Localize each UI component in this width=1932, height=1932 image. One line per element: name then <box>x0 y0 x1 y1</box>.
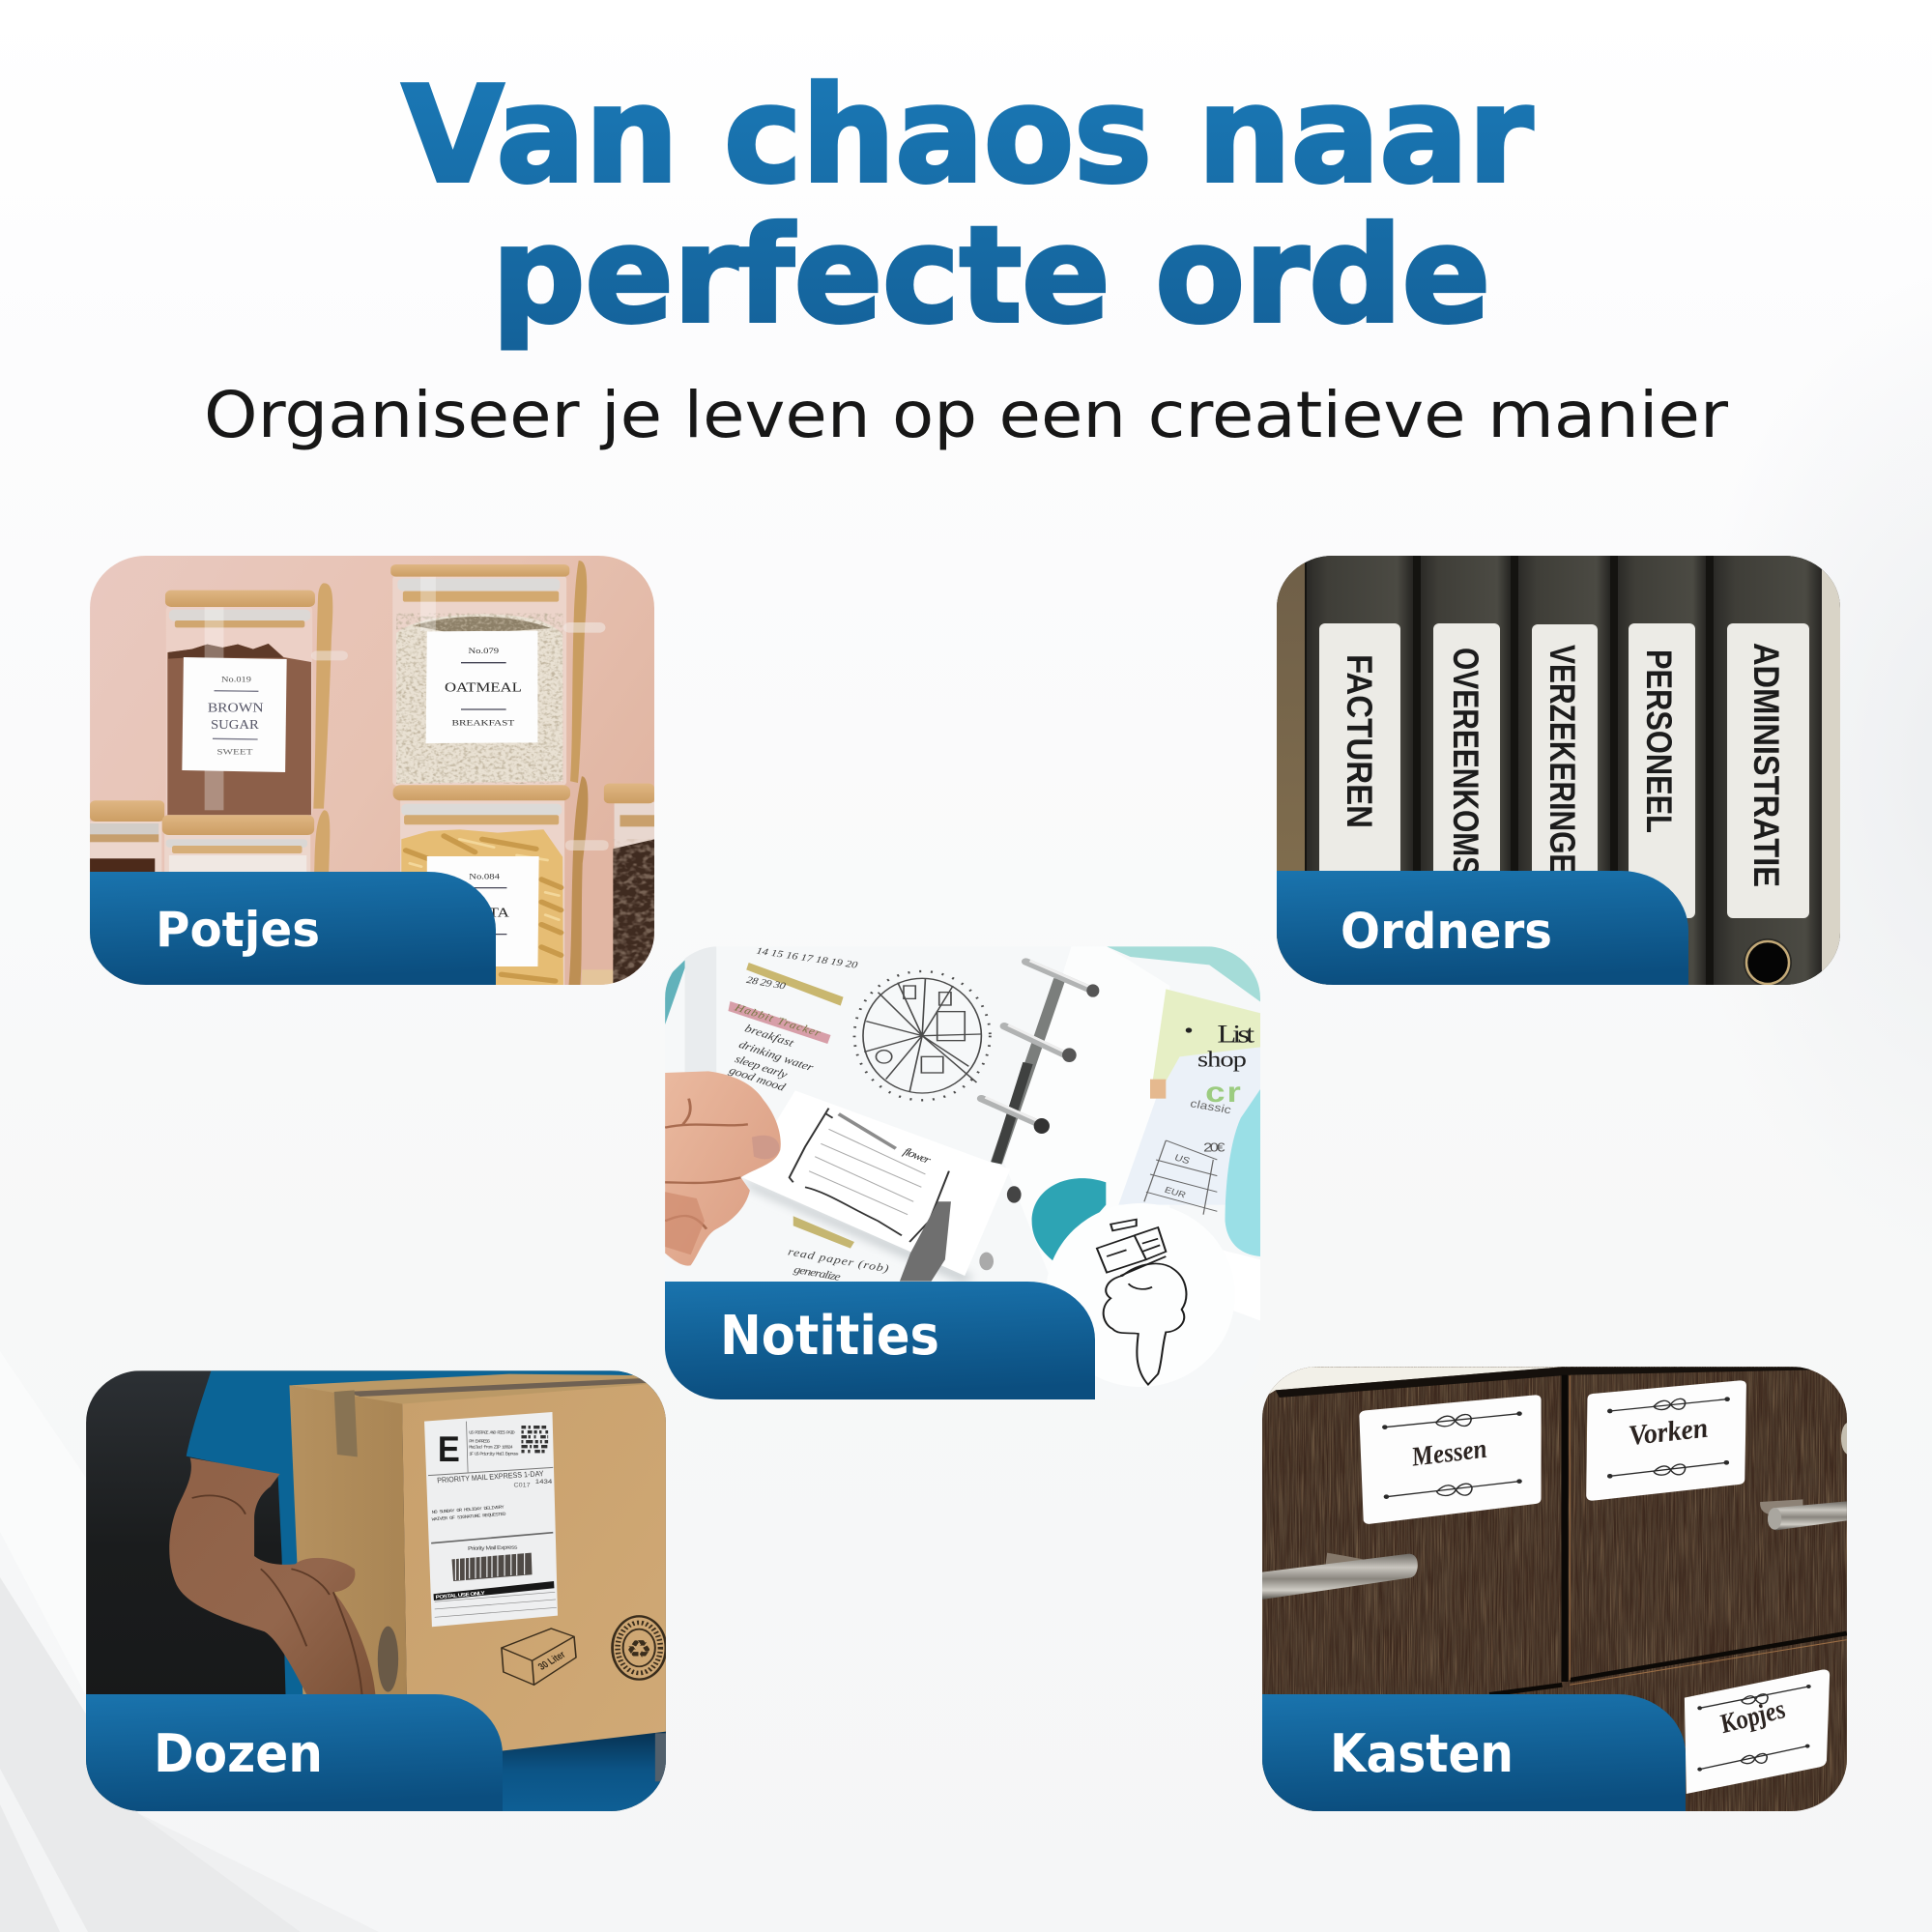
label: Vorken: Vorken <box>1627 1411 1710 1451</box>
label: pasta: PASTA <box>460 905 509 920</box>
price tag and stripes: EUR <box>1163 1186 1187 1200</box>
calendar and tracker notes <box>727 946 859 1093</box>
price tag and stripes: 20€ <box>1203 1141 1226 1155</box>
shipping label: PRIORITY MAIL EXPRESS 1-DAY <box>437 1469 544 1485</box>
label band: Ordners <box>1277 871 1688 985</box>
box pictogram: 30 Liter <box>536 1649 568 1673</box>
label: brown sugar: SUGAR <box>211 717 260 733</box>
shipping label <box>424 1412 558 1627</box>
label band: Ordners: Ordners <box>1341 904 1552 961</box>
photo: binders <box>1277 556 1840 987</box>
shipping label: WAIVER OF SIGNATURE REQUESTED <box>432 1512 506 1522</box>
label: ADMINISTRATIE <box>1727 623 1809 918</box>
teal shape <box>1032 1178 1106 1263</box>
handle: right <box>1760 1499 1847 1530</box>
jar: pasta <box>393 776 609 985</box>
label: OVEREENKOMSTEN <box>1433 623 1500 871</box>
label: PERSONEEL <box>1629 623 1695 918</box>
jar: lower middle <box>162 810 330 872</box>
calendar and tracker notes: 14 15 16 17 18 19 20 <box>755 946 859 970</box>
label band: Potjes: Potjes <box>156 902 320 958</box>
shipping label: PM EXPRESS <box>469 1439 490 1444</box>
recycling stamp: ♻ <box>626 1634 652 1663</box>
lower handwriting <box>787 1216 890 1283</box>
label band: Dozen <box>86 1694 503 1811</box>
teal device <box>1226 1089 1260 1256</box>
sticker circle with cat doodle <box>1053 1203 1187 1386</box>
calendar and tracker notes: breakfast <box>743 1023 796 1050</box>
door knob edge <box>1841 1423 1857 1455</box>
label: FACTUREN <box>1319 623 1400 985</box>
hand <box>665 1071 781 1266</box>
label: FACTUREN: FACTUREN <box>1340 654 1379 828</box>
jar: brown sugar <box>165 583 348 817</box>
label band: Dozen: Dozen <box>154 1723 323 1784</box>
label: Kopjes <box>1685 1670 1830 1794</box>
shipping label: Mailed from ZIP 10024 <box>469 1445 513 1450</box>
label: brown sugar: No.019 <box>221 675 252 683</box>
label: Vorken <box>1586 1380 1746 1501</box>
shipping label: NO SUNDAY OR HOLIDAY DELIVERY <box>432 1505 505 1515</box>
panel: potjes <box>90 556 654 985</box>
label band: Notities: Notities <box>720 1305 939 1368</box>
label: Messen: Messen <box>1408 1433 1489 1472</box>
label: oatmeal <box>426 631 537 743</box>
panel: dozen <box>86 1370 666 1811</box>
label: brown sugar <box>182 657 287 772</box>
label: oatmeal: OATMEAL <box>445 679 522 695</box>
panel: ordners <box>1277 556 1840 987</box>
title <box>402 59 1533 353</box>
jar: oatmeal <box>390 561 605 786</box>
jar: left small <box>90 800 164 872</box>
label: VERZEKERINGEN <box>1532 624 1598 871</box>
calendar and tracker notes: good mood <box>727 1064 788 1093</box>
time wheel drawing <box>854 971 990 1100</box>
binder ring <box>1744 938 1792 987</box>
shipping label: E <box>438 1429 460 1469</box>
label: brown sugar: BROWN <box>208 701 264 715</box>
binder rings <box>979 961 1099 1270</box>
binder clip <box>900 1201 951 1282</box>
label: pasta: No.084 <box>469 872 501 880</box>
subtitle: Organiseer je leven op een creatieve manier <box>204 378 1729 452</box>
label: Kopjes: Kopjes <box>1715 1694 1790 1740</box>
jar: coffee <box>604 784 654 985</box>
label band: Potjes <box>90 872 496 985</box>
shipping label: POSTAL USE ONLY <box>435 1591 485 1600</box>
calendar and tracker notes: sleep early <box>733 1053 790 1081</box>
lower handwriting: generalize <box>793 1263 843 1283</box>
calendar and tracker notes: 28 29 30 <box>745 975 787 992</box>
price tag and stripes: shop <box>1197 1047 1247 1072</box>
recycling stamp <box>613 1616 666 1680</box>
handle: left <box>1262 1553 1418 1600</box>
label: oatmeal: No.079 <box>468 647 500 655</box>
price tag and stripes: List <box>1217 1020 1255 1049</box>
note card: flower <box>901 1145 934 1167</box>
label: OVEREENKOMSTEN: OVEREENKOMSTEN <box>1446 648 1485 934</box>
label: brown sugar: SWEET <box>216 747 253 756</box>
photo: person carrying box <box>86 1370 666 1811</box>
label: oatmeal: BREAKFAST <box>451 718 515 727</box>
title: perfecte orde <box>492 199 1490 353</box>
arm and hand <box>169 1457 375 1694</box>
shipping label: 1F US Priority Mail Express <box>469 1452 519 1456</box>
price tag and stripes: classic <box>1189 1097 1232 1116</box>
shipping label: US POSTAGE AND FEES PAID <box>469 1430 515 1435</box>
countertop strip <box>1262 1367 1562 1399</box>
label: PERSONEEL: PERSONEEL <box>1639 649 1679 833</box>
photo: cabinet doors with labels <box>1262 1367 1857 1811</box>
calendar and tracker notes: Habbit Tracker <box>732 1000 823 1039</box>
label: VERZEKERINGEN: VERZEKERINGEN <box>1543 645 1582 894</box>
label: pasta <box>427 856 539 966</box>
door gaps <box>1489 1375 1847 1694</box>
price tag and stripes: cr <box>1205 1077 1241 1109</box>
title: Van chaos naar <box>402 59 1533 213</box>
price tag and stripes: US <box>1172 1153 1191 1167</box>
shipping label: C017 <box>514 1483 531 1488</box>
label band: Notities <box>665 1282 1095 1399</box>
panel: kasten <box>1262 1367 1857 1811</box>
photo: glass jars with labels <box>90 556 654 985</box>
label band: Kasten <box>1262 1694 1686 1811</box>
shipping label: Priority Mail Express <box>468 1544 518 1552</box>
blue shirt <box>187 1370 666 1694</box>
panel: notities <box>665 946 1260 1400</box>
lower handwriting: read paper (rob) <box>787 1246 890 1275</box>
label band: Kasten: Kasten <box>1330 1723 1514 1784</box>
box <box>289 1374 666 1751</box>
shipping label: 1434 <box>535 1478 552 1485</box>
label: Messen <box>1359 1395 1542 1524</box>
label: ADMINISTRATIE: ADMINISTRATIE <box>1746 643 1786 887</box>
photo: planner with notes <box>665 946 1260 1400</box>
calendar and tracker notes: drinking water <box>736 1038 816 1074</box>
box pictogram <box>502 1629 576 1685</box>
note card <box>742 1090 1010 1283</box>
price tag and stripes <box>1118 989 1260 1215</box>
